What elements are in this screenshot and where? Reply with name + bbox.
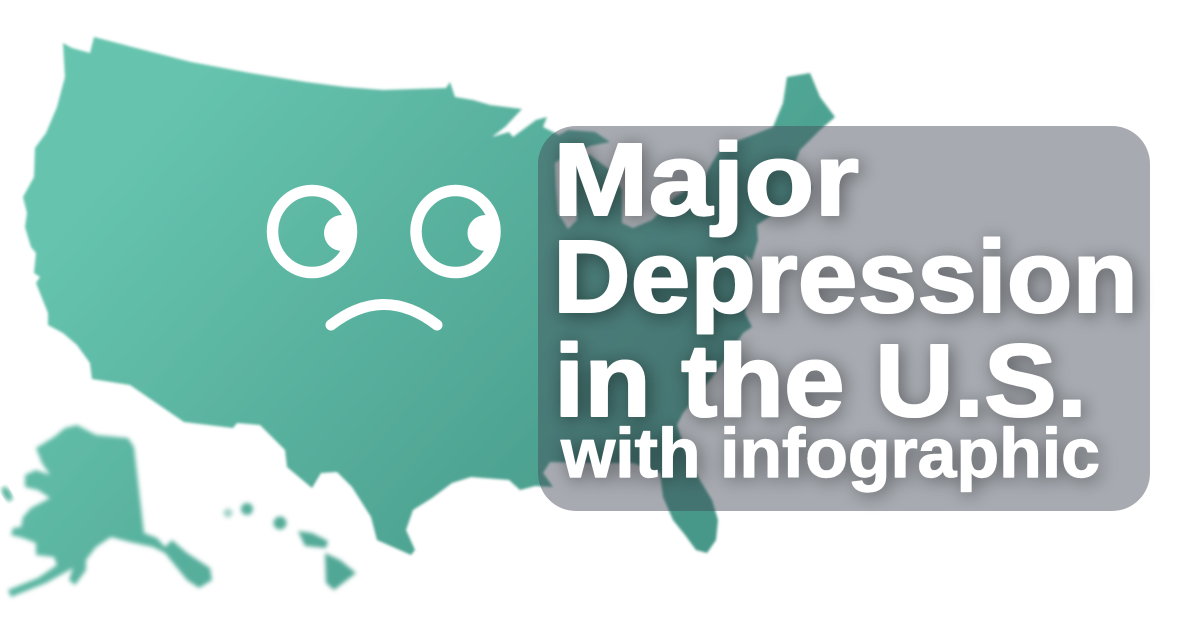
Alaska island: [0, 485, 14, 503]
title: Depression: [553, 219, 1138, 334]
icon: frown mouth: [331, 304, 437, 325]
subtitle: with infographic: [560, 414, 1100, 492]
panel: title backdrop: [538, 126, 1150, 511]
icon: left eye: [272, 190, 360, 272]
title: in the U.S.: [554, 323, 1087, 438]
title: Major: [553, 122, 859, 237]
icon: right eye: [416, 190, 504, 272]
map: United States: [0, 37, 835, 597]
Hawaii: [224, 503, 356, 590]
Alaska: [8, 425, 212, 597]
title: [553, 122, 1138, 438]
face: sad expression: [272, 190, 504, 325]
contiguous states: [23, 37, 835, 555]
